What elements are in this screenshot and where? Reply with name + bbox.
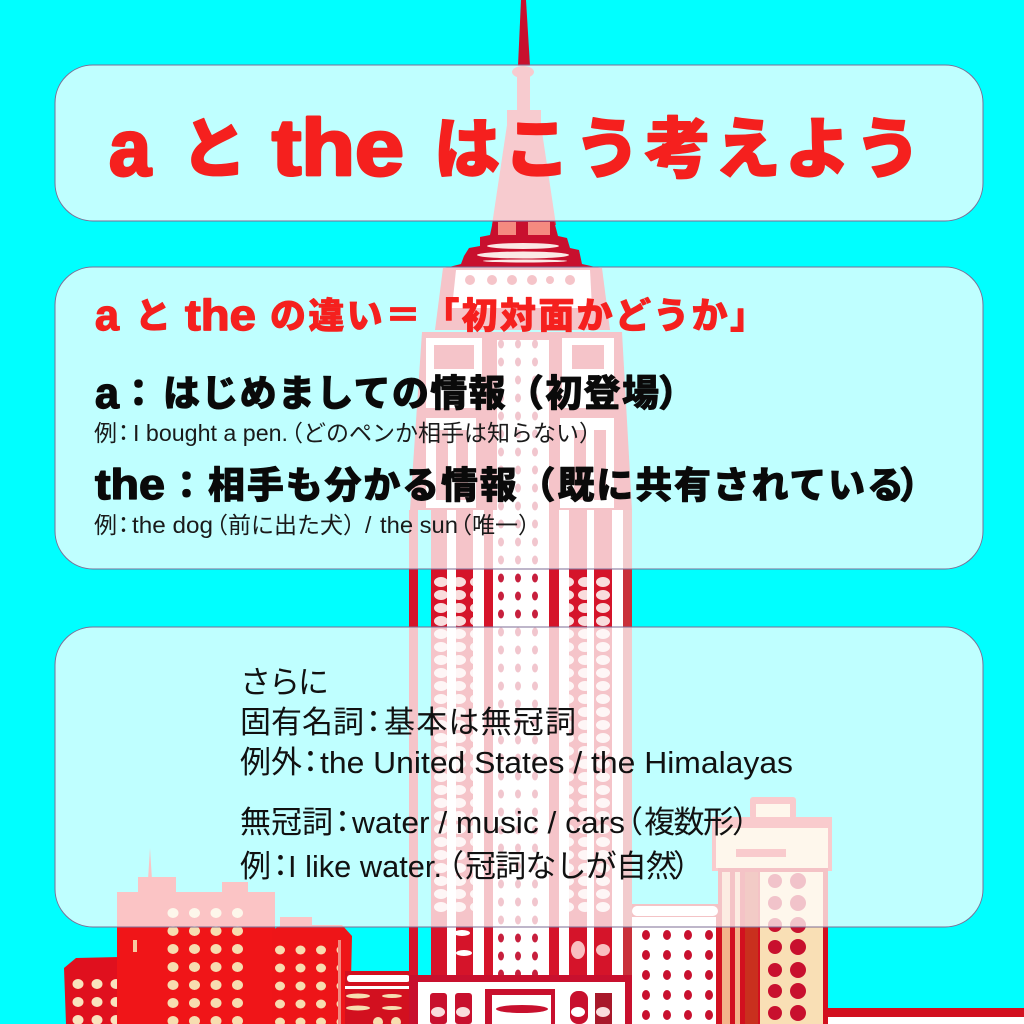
note: zero article: ） — [732, 805, 763, 840]
tower base entrance — [409, 975, 632, 1024]
building: orange tower — [712, 797, 832, 1024]
building: left mid block — [272, 917, 352, 1024]
note: zero article: （ — [612, 805, 643, 840]
definition: a: はじめましての情報（初登場 — [163, 363, 659, 417]
heading: a と the の違い: の違い＝「初対面かどうか」 — [270, 287, 766, 339]
note: proper nouns: 固有名詞 — [240, 705, 364, 740]
definition: the: ） — [899, 455, 936, 509]
tower shaft columns — [409, 510, 632, 980]
note: proper nouns: ： — [358, 705, 389, 740]
example: a: ： — [112, 420, 135, 446]
example: a: （どのペンか相手は知らない） — [280, 420, 602, 446]
building: low block with stripes — [345, 971, 413, 1024]
note: zero article: 複数形 — [644, 805, 734, 840]
panel: title — [55, 65, 983, 221]
example: the: ： — [112, 512, 135, 538]
tower middle section — [410, 332, 632, 510]
example: a: I bought a pen. — [133, 420, 288, 446]
example: a: 例 — [94, 420, 117, 446]
definition: the: ： — [168, 455, 205, 509]
example: the: 例 — [94, 512, 117, 538]
note: zero article example: （ — [433, 849, 464, 884]
tower: Empire State Building — [409, 0, 632, 1024]
tower spire — [518, 0, 530, 66]
note: exceptions: the United States / the Himalayas — [320, 745, 793, 780]
definition: the: the — [95, 461, 165, 509]
example: the: （ — [205, 512, 228, 538]
example: the: / — [365, 512, 372, 538]
building: far left — [64, 957, 120, 1024]
title text: はこう考えよう — [434, 96, 921, 192]
note: zero article example: 冠詞なしが自然 — [465, 849, 677, 884]
title text: the — [272, 103, 404, 192]
note: zero article example: 例 — [240, 849, 271, 884]
tower mast — [492, 66, 556, 225]
definition: a: a — [95, 369, 120, 418]
example: the: 唯一） — [472, 512, 541, 538]
title text: a — [109, 103, 151, 192]
note: proper nouns: 基本は無冠詞 — [384, 705, 576, 740]
heading: a と the の違い: と — [135, 287, 171, 339]
note: exceptions: ： — [295, 745, 326, 780]
heading: a と the の違い: a — [95, 291, 120, 340]
building: bottom right strip — [828, 1008, 1024, 1024]
example: the: the sun — [380, 512, 458, 538]
note: zero article example: I like water. — [288, 849, 442, 884]
note: さらに: さらに — [240, 665, 329, 700]
definition: a: ： — [120, 363, 157, 417]
example: the: （ — [449, 512, 472, 538]
definition: a: ） — [658, 363, 695, 417]
note: zero article: 無冠詞 — [240, 805, 333, 840]
heading: a と the の違い: the — [185, 291, 256, 340]
note: zero article example: ： — [265, 849, 296, 884]
tower upper section — [435, 268, 610, 330]
definition: the: 相手も分かる情報（既に共有されている — [208, 455, 904, 509]
note: exceptions: 例外 — [240, 745, 302, 780]
note: zero article: ： — [327, 805, 358, 840]
panel: difference between a and the — [55, 267, 983, 569]
example: the: 前に出た犬） — [228, 512, 366, 538]
title text: と — [181, 96, 247, 192]
building: white block right of tower — [630, 904, 720, 1024]
tower crown — [445, 221, 600, 268]
example: the: the dog — [132, 512, 213, 538]
note: zero article example: ） — [673, 849, 704, 884]
note: zero article: water / music / cars — [351, 805, 625, 840]
panel: further notes — [55, 627, 983, 927]
building: left red block — [117, 848, 275, 1024]
